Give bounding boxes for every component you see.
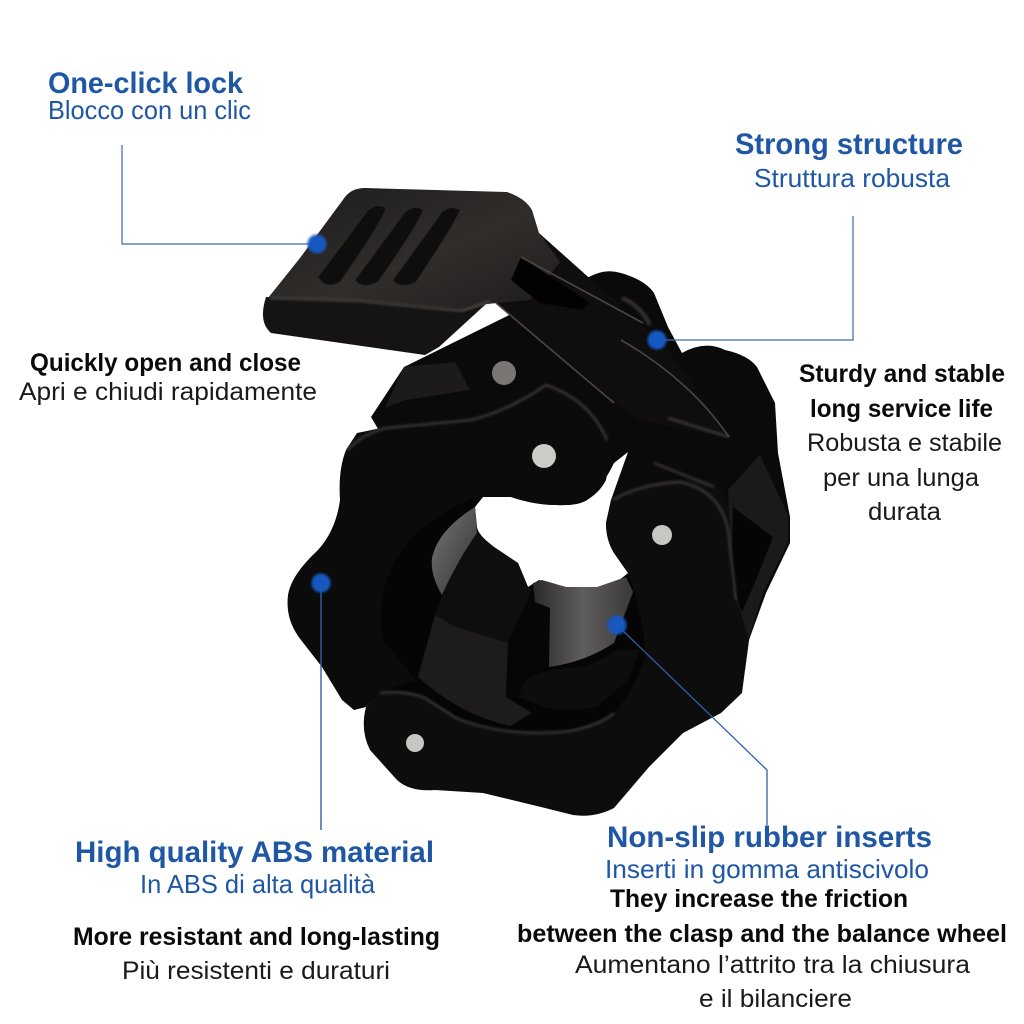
dot: insert — [608, 616, 626, 634]
heading: high quality ABS material: In ABS di alta qualità — [140, 869, 376, 899]
right outer plate dark facet — [731, 507, 773, 612]
lever shaft slot — [511, 257, 590, 310]
rivet pin right — [652, 525, 672, 545]
left rubber insert — [435, 533, 532, 643]
text: quickly open and close: Quickly open and close — [30, 349, 301, 377]
heading: one-click lock — [48, 67, 251, 125]
rivet pin lever — [492, 361, 516, 385]
dot: roller — [648, 330, 666, 350]
text: quickly open and close: Apri e chiudi rapidamente — [19, 378, 317, 406]
text: sturdy and stable: durata — [868, 498, 941, 526]
text: they increase the friction: between the clasp and the balance wheel — [517, 920, 1007, 948]
back body silhouette — [371, 271, 790, 700]
heading: one-click lock: One-click lock — [48, 67, 243, 100]
rivet pin bottom — [406, 734, 424, 752]
text: more resistant: Più resistenti e duraturi — [122, 957, 390, 985]
back body facet — [385, 362, 470, 408]
callout line: one-click lock — [122, 145, 317, 244]
text: sturdy and stable — [799, 360, 1005, 526]
text: quickly open and close — [19, 349, 317, 406]
rivet pin top — [532, 444, 556, 468]
text: they increase the friction — [517, 885, 1007, 1013]
dot: body — [312, 574, 330, 592]
lower rubber block — [518, 650, 640, 710]
text: they increase the friction: Aumentano l’attrito tra la chiusura — [575, 951, 970, 979]
right outer plate facet — [728, 455, 788, 638]
lever thumb plate — [268, 188, 560, 310]
clamp product photo — [263, 188, 790, 816]
heading: non-slip rubber inserts — [605, 821, 932, 884]
text: more resistant: More resistant and long-lasting — [73, 923, 440, 951]
heading: one-click lock: Blocco con un clic — [48, 95, 251, 125]
text: sturdy and stable: Sturdy and stable — [799, 360, 1005, 388]
lever hinge shaft — [486, 225, 729, 437]
right hinge link — [364, 479, 749, 816]
text: sturdy and stable: Robusta e stabile — [807, 429, 1002, 457]
heading: high quality ABS material: High quality ABS material — [75, 836, 434, 869]
left upper link — [288, 383, 609, 710]
callout line: ABS material — [320, 583, 322, 830]
text: they increase the friction: e il bilanciere — [699, 985, 852, 1013]
link highlights — [348, 385, 736, 733]
text: sturdy and stable: long service life — [810, 395, 993, 423]
insert dark channel — [506, 590, 552, 697]
text: more resistant — [73, 923, 440, 985]
lever front edge highlight — [270, 298, 490, 311]
callout line: strong structure — [657, 216, 853, 340]
dot: lever — [308, 234, 326, 254]
heading: non-slip rubber inserts: Inserti in gomma antiscivolo — [605, 854, 929, 884]
lower ring filler — [370, 600, 650, 750]
lever side rails — [496, 257, 729, 437]
right gray rubber insert — [533, 577, 633, 667]
heading: non-slip rubber inserts: Non-slip rubber inserts — [607, 821, 932, 854]
left gray insert — [432, 507, 477, 595]
heading: strong structure: Struttura robusta — [754, 163, 951, 193]
text: sturdy and stable: per una lunga — [823, 464, 979, 492]
roller highlight — [622, 298, 650, 325]
marker dots — [308, 234, 666, 634]
callout line: rubber inserts — [617, 625, 767, 825]
lower inner section — [418, 615, 532, 726]
inner ring recess — [377, 494, 645, 730]
lever front face — [263, 297, 486, 355]
white centre hole — [475, 452, 628, 587]
heading: strong structure: Strong structure — [735, 128, 963, 161]
lever grip grooves — [318, 205, 460, 286]
heading: high quality ABS material — [75, 836, 434, 899]
text: they increase the friction: They increase the friction — [610, 885, 908, 913]
heading: strong structure — [735, 128, 963, 193]
